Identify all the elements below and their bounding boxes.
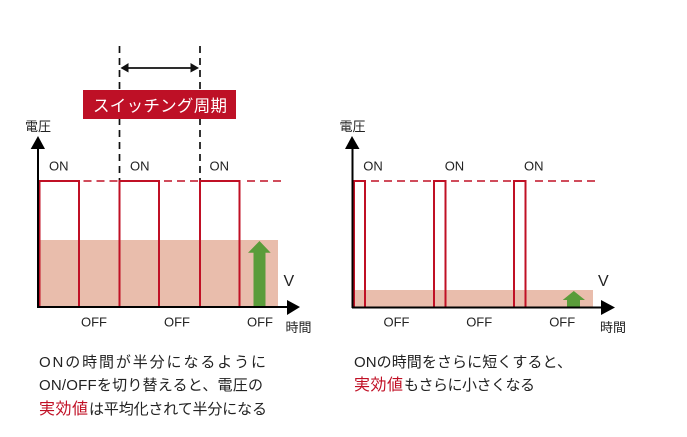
horizontal axis — [352, 300, 615, 315]
caption: left: 実効値 — [39, 400, 88, 418]
vertical axis — [345, 136, 360, 308]
green voltage arrow — [248, 241, 271, 306]
effective voltage area — [39, 240, 278, 307]
voltage dashed level — [84, 180, 281, 182]
axis label: voltage: 電圧 — [340, 119, 366, 134]
switching period label — [83, 90, 236, 119]
ON labels: ON — [445, 158, 464, 174]
caption: right: もさらに小さくなる — [404, 377, 535, 394]
ON labels — [363, 158, 544, 174]
ON labels — [49, 158, 229, 174]
label V: V — [598, 273, 609, 290]
switching period guide lines — [120, 46, 200, 181]
ON labels: ON — [524, 158, 544, 174]
OFF labels: OFF — [466, 314, 492, 330]
voltage dashed level — [371, 180, 595, 182]
ON labels: ON — [49, 158, 68, 174]
pulse waveform — [40, 181, 240, 307]
panel: right chart — [340, 119, 626, 335]
caption: right — [354, 354, 572, 394]
caption: right: 実効値 — [354, 376, 403, 394]
caption: right: ONの時間をさらに短くすると、 — [354, 354, 572, 371]
panel: left chart — [25, 46, 312, 335]
period span arrow — [120, 63, 199, 72]
caption: left: ON/OFFを切り替えると、電圧の — [39, 377, 263, 394]
axis label: voltage: 電圧 — [25, 119, 51, 134]
green voltage arrow — [563, 291, 585, 307]
pulse waveform — [354, 181, 526, 307]
OFF labels: OFF — [81, 314, 107, 330]
effective voltage area — [353, 290, 593, 307]
OFF labels — [81, 314, 273, 330]
OFF labels — [384, 314, 575, 330]
caption: left: ONの時間が半分になるように — [39, 354, 266, 371]
OFF labels: OFF — [247, 314, 273, 330]
ON labels: ON — [210, 158, 229, 174]
OFF labels: OFF — [549, 314, 575, 330]
ON labels: ON — [363, 158, 383, 174]
ON labels: ON — [130, 158, 150, 174]
label V: V — [284, 273, 294, 290]
axis label: time: 時間 — [286, 320, 312, 335]
vertical axis — [31, 136, 45, 308]
OFF labels: OFF — [384, 314, 410, 330]
switching period label: スイッチング周期 — [93, 96, 227, 116]
caption: left: は平均化されて半分になる — [89, 401, 267, 418]
caption: left — [39, 354, 267, 418]
horizontal axis — [37, 300, 300, 315]
axis label: time: 時間 — [600, 320, 626, 335]
OFF labels: OFF — [164, 314, 190, 330]
